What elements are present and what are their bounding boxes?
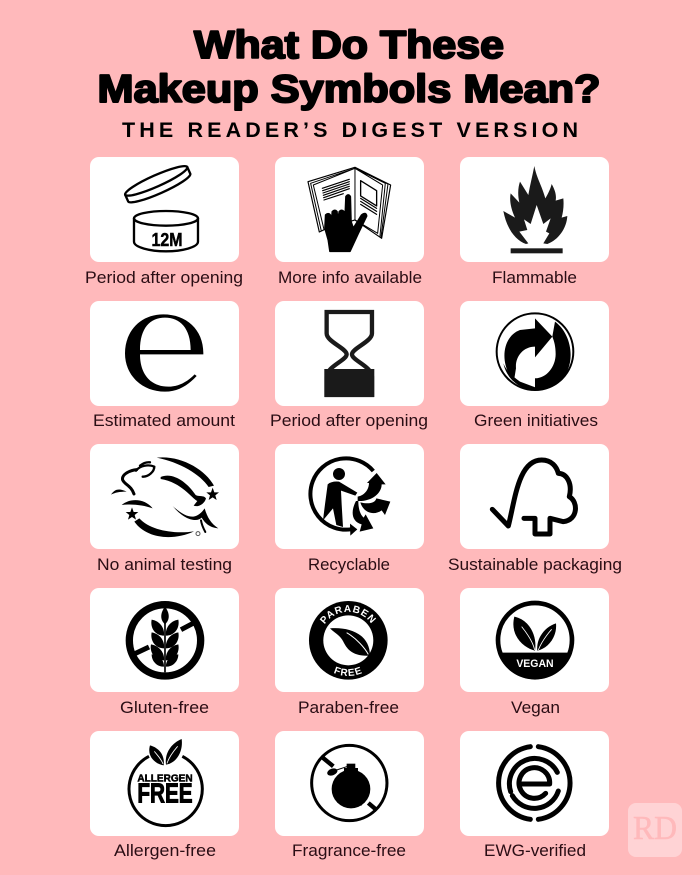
label: Sustainable packaging — [448, 555, 622, 574]
label: Period after opening — [85, 268, 243, 287]
icon: open jar 12M: 12M — [151, 229, 182, 250]
panel: no animal testing — [90, 444, 239, 574]
logo: RD watermark: RD — [633, 810, 677, 847]
label: Flammable — [492, 268, 577, 287]
label: Vegan — [511, 698, 560, 717]
icon: EWG concentric e — [499, 747, 570, 819]
icon: allergen free badge: FREE — [137, 778, 193, 809]
icon: hourglass — [324, 312, 374, 397]
label: Period after opening — [270, 411, 428, 430]
icon: vegan badge — [498, 603, 572, 680]
panel: sustainable packaging — [448, 444, 622, 574]
label: No animal testing — [97, 555, 232, 574]
panel: more info available — [275, 157, 424, 287]
label: Allergen-free — [114, 841, 216, 860]
panel: allergen-free — [90, 731, 239, 860]
icon: allergen free badge — [129, 739, 202, 826]
title: Makeup Symbols Mean? — [98, 68, 600, 111]
label: Estimated amount — [93, 411, 235, 430]
logo: RD watermark — [628, 803, 682, 857]
panel: fragrance-free — [275, 731, 424, 860]
label: Gluten-free — [120, 698, 209, 717]
title — [98, 24, 600, 111]
icon: check and tree — [492, 460, 575, 534]
icon: triman recycling figure — [310, 458, 390, 536]
panel: vegan — [460, 588, 609, 717]
label: Paraben-free — [298, 698, 399, 717]
icon: leaping bunny — [111, 457, 219, 537]
panel: paraben-free — [275, 588, 424, 717]
icon: paraben free badge — [309, 601, 388, 680]
icon: green dot arrows — [497, 313, 573, 391]
icon: crossed wheat — [129, 605, 201, 676]
title: What Do These — [194, 24, 504, 67]
label: Recyclable — [308, 555, 390, 574]
label: Green initiatives — [474, 411, 598, 430]
subtitle: THE READER’S DIGEST VERSION — [122, 118, 578, 142]
panel: period after opening jar — [85, 157, 243, 287]
icon: flame — [503, 166, 567, 253]
panel: green initiatives — [460, 301, 609, 430]
label: More info available — [278, 268, 422, 287]
icon: allergen free badge: ALLERGEN — [137, 773, 193, 784]
icon: paraben free badge: PARABEN — [320, 605, 376, 624]
icon: estimated e — [125, 314, 203, 392]
panel: estimated amount — [90, 301, 239, 430]
panel: period after opening hourglass — [270, 301, 428, 430]
icon: vegan badge: VEGAN — [516, 658, 554, 670]
panel: recyclable — [275, 444, 424, 574]
panel: EWG-verified — [460, 731, 609, 860]
icon: book and hand — [308, 167, 391, 251]
panel: gluten-free — [90, 588, 239, 717]
label: Fragrance-free — [292, 841, 406, 860]
icon: crossed perfume bottle — [312, 745, 387, 821]
icon: paraben free badge: FREE — [334, 666, 362, 676]
panel: flammable — [460, 157, 609, 287]
label: EWG-verified — [484, 841, 586, 860]
icon: open jar 12M — [123, 162, 198, 251]
